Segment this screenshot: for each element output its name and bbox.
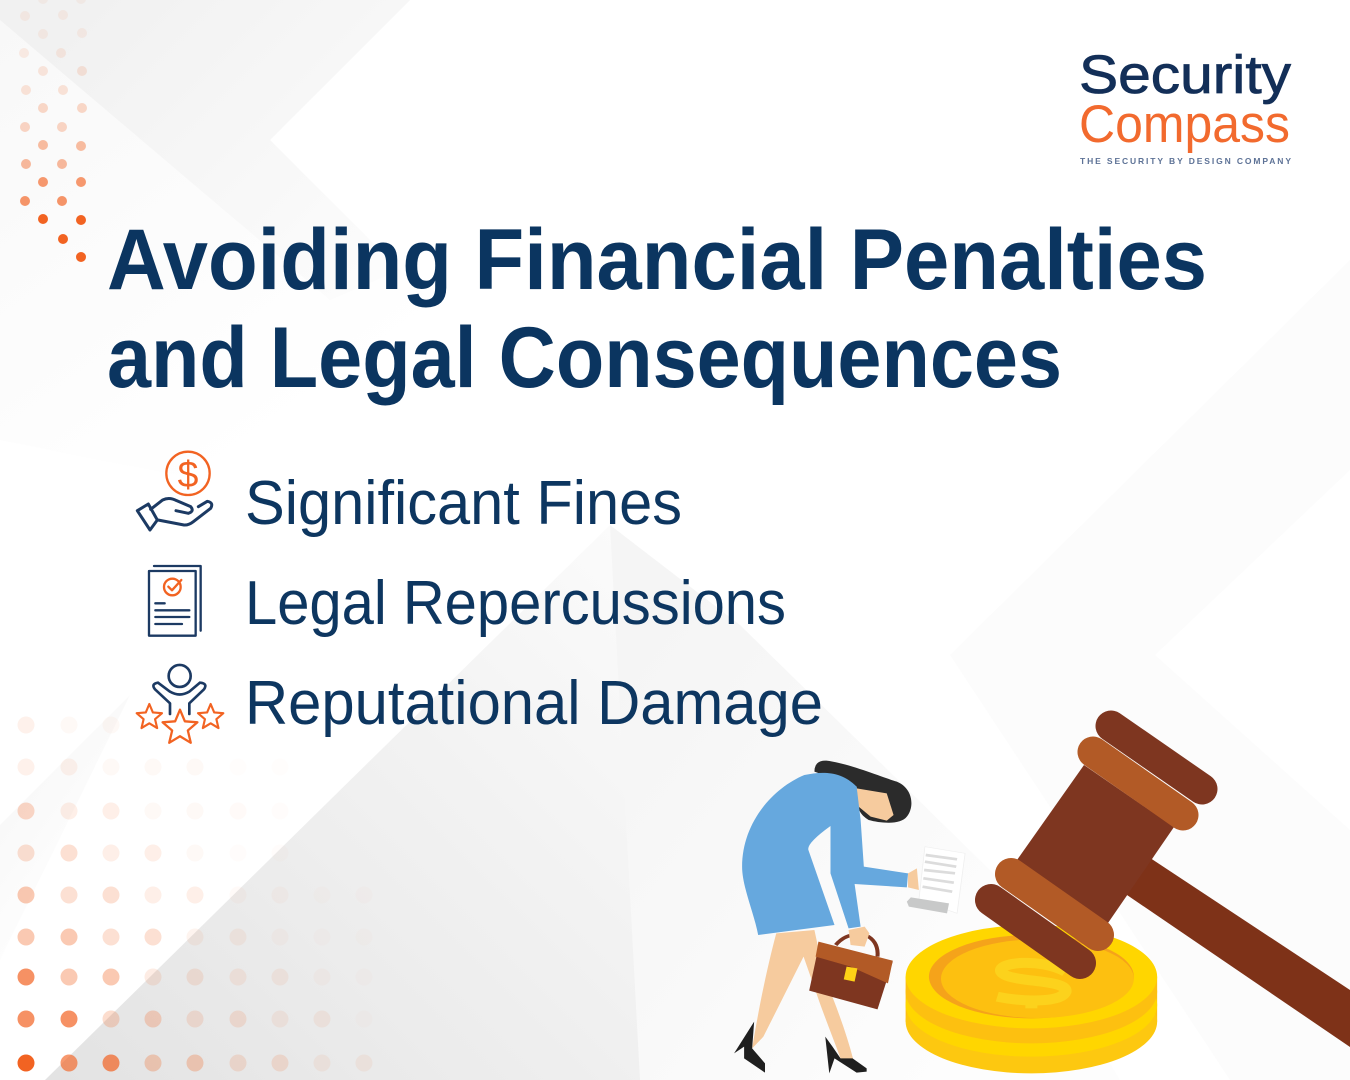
icon: hand holding dollar coin: $ — [178, 453, 199, 495]
title — [107, 212, 1207, 406]
logo wordmark: Compass: Compass — [1079, 95, 1290, 154]
woman — [734, 761, 919, 1073]
illustration: coins, gavel and woman — [734, 726, 1350, 1073]
icon: person with stars — [137, 665, 223, 743]
paper document — [907, 847, 965, 913]
list item: Significant Fines: Significant Fines — [245, 469, 682, 538]
list item: Legal Repercussions: Legal Repercussions — [245, 569, 786, 638]
icon: legal document — [149, 566, 201, 636]
title: and Legal Consequences — [107, 310, 1062, 406]
dots: bottom left — [18, 716, 372, 1072]
title: Avoiding Financial Penalties — [107, 212, 1207, 308]
logo — [1079, 45, 1291, 166]
icon: hand holding dollar coin — [137, 452, 212, 530]
logo tagline: THE SECURITY BY DESIGN COMPANY — [1080, 156, 1291, 166]
gavel — [991, 726, 1350, 1047]
logo wordmark: Security: Security — [1079, 45, 1291, 105]
list item: Reputational Damage: Reputational Damage — [245, 669, 823, 738]
coin stack — [906, 925, 1157, 1073]
dots: top left — [19, 0, 87, 262]
